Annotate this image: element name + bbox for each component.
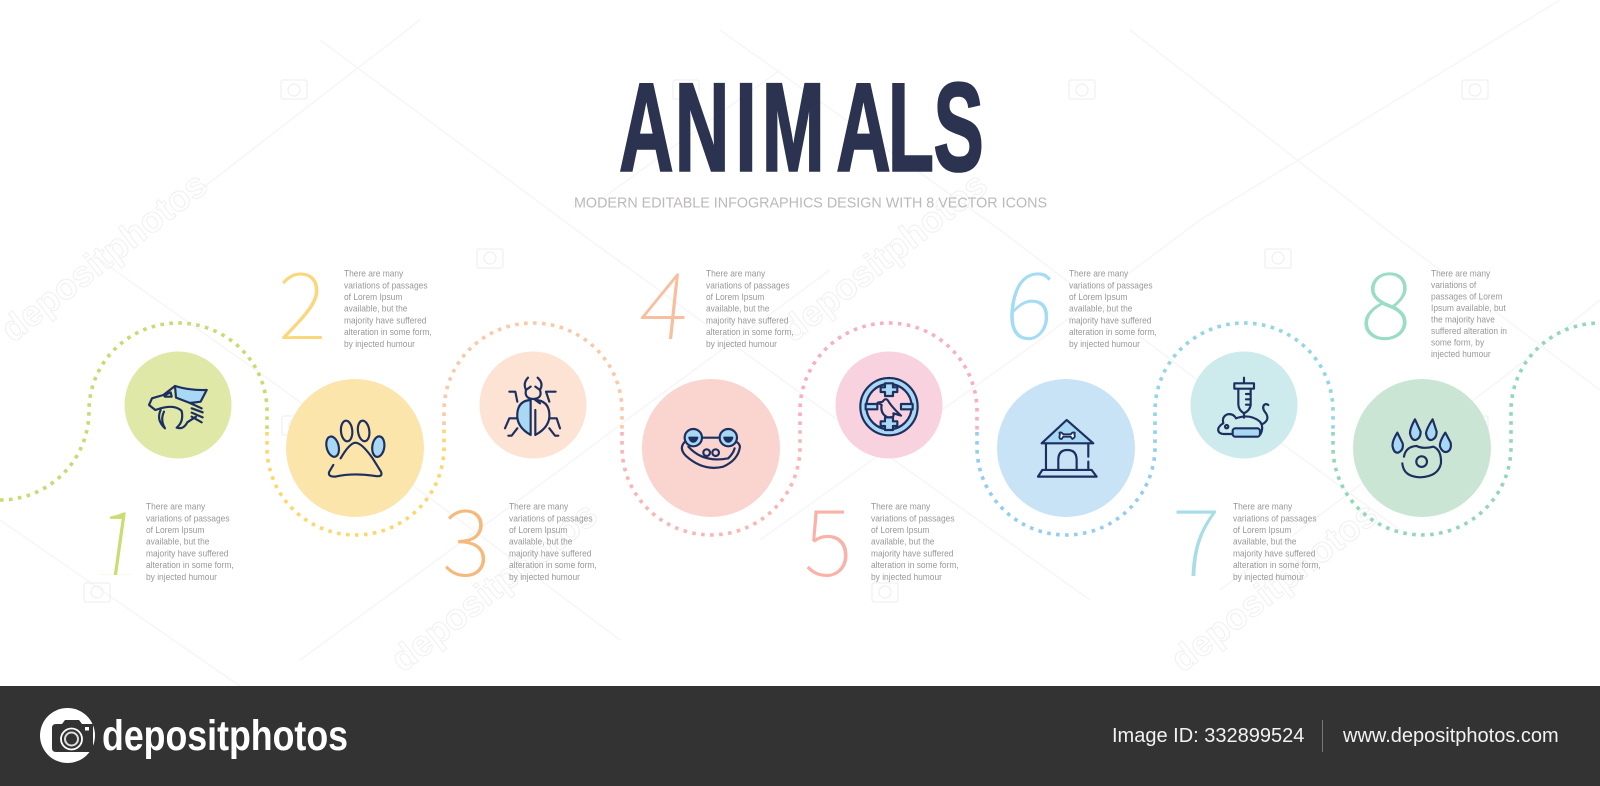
step 4 circle <box>642 379 780 517</box>
watermark pattern: depositphotos <box>1163 493 1385 680</box>
number 6: 6 <box>999 231 1062 366</box>
text block 1: variations of passages <box>146 513 230 523</box>
number 3: 3 <box>442 468 490 603</box>
text block 5: by injected humour <box>871 572 942 582</box>
text block 8: injected humour <box>1431 349 1491 359</box>
text block 7: by injected humour <box>1233 572 1304 582</box>
text block 7: There are many <box>1233 501 1293 512</box>
text block 3: available, but the <box>509 536 573 547</box>
text block 1: alteration in some form, <box>146 560 234 570</box>
icon: frog <box>682 429 740 468</box>
text block 2: by injected humour <box>344 339 415 349</box>
text block 2: alteration in some form, <box>344 327 432 337</box>
footer bar <box>0 686 1600 786</box>
icon: clawed paw <box>1392 419 1451 477</box>
text block 6: of Lorem Ipsum <box>1069 292 1127 302</box>
text block 3: majority have suffered <box>509 548 592 558</box>
text block 3: of Lorem Ipsum <box>509 525 567 535</box>
text block 4: majority have suffered <box>706 315 789 325</box>
text block 6: majority have suffered <box>1069 315 1152 325</box>
text block 1: There are many <box>146 501 206 512</box>
text block 4: by injected humour <box>706 339 777 349</box>
text block 7: of Lorem Ipsum <box>1233 525 1291 535</box>
text block 8: suffered alteration in <box>1431 326 1507 336</box>
text block 8: the majority have <box>1431 314 1495 325</box>
number 5: 5 <box>804 468 852 603</box>
logo wordmark: depositphotos <box>102 712 348 760</box>
number 1: 1 <box>85 471 153 605</box>
text block 4: There are many <box>706 268 766 279</box>
text block 4: of Lorem Ipsum <box>706 292 764 302</box>
text block 6: alteration in some form, <box>1069 327 1157 337</box>
text block 6: by injected humour <box>1069 339 1140 349</box>
watermark pattern: depositphotos <box>773 163 995 350</box>
watermark pattern: depositphotos <box>383 493 605 680</box>
text block 1: of Lorem Ipsum <box>146 525 204 535</box>
step 3 circle <box>480 352 586 458</box>
text block 8: passages of Lorem <box>1431 291 1502 302</box>
image id: Image ID: 332899524 <box>1112 725 1304 747</box>
icon: lab mouse with syringe <box>1218 378 1268 437</box>
number 4: 4 <box>634 231 697 366</box>
text block 4: alteration in some form, <box>706 327 794 337</box>
text block 2: majority have suffered <box>344 315 427 325</box>
icon: paw print <box>324 420 386 477</box>
text block 2: variations of passages <box>344 280 428 290</box>
text block 7: majority have suffered <box>1233 548 1316 558</box>
number 7: 7 <box>1172 468 1220 603</box>
subtitle: MODERN EDITABLE INFOGRAPHICS DESIGN WITH 8 VECTOR ICONS <box>574 196 1047 212</box>
step 5 circle <box>836 352 942 458</box>
text block 5: available, but the <box>871 536 935 547</box>
text block 2: of Lorem Ipsum <box>344 292 402 302</box>
text block 8: variations of <box>1431 280 1477 290</box>
icon: dog house <box>1038 420 1097 477</box>
icon: bird in crosshair <box>860 378 918 435</box>
icon: stag beetle <box>505 378 560 436</box>
text block 8: There are many <box>1431 268 1491 279</box>
step 2 circle <box>286 379 424 517</box>
number 2: 2 <box>278 231 326 366</box>
text block 7: alteration in some form, <box>1233 560 1321 570</box>
text block 3: alteration in some form, <box>509 560 597 570</box>
text block 2: There are many <box>344 268 404 279</box>
text block 8: some form, by <box>1431 337 1485 348</box>
website: www.depositphotos.com <box>1342 725 1559 747</box>
icon: sabre-tooth tiger <box>149 386 207 428</box>
text block 4: variations of passages <box>706 280 790 290</box>
text block 5: majority have suffered <box>871 548 954 558</box>
text block 5: alteration in some form, <box>871 560 959 570</box>
text block 6: There are many <box>1069 268 1129 279</box>
text block 6: variations of passages <box>1069 280 1153 290</box>
step 8 circle <box>1353 379 1491 517</box>
step 7 circle <box>1190 352 1298 458</box>
text block 4: available, but the <box>706 303 770 314</box>
text block 7: variations of passages <box>1233 513 1317 523</box>
text block 2: available, but the <box>344 303 408 314</box>
text block 8: Ipsum available, but <box>1431 303 1506 313</box>
number 8: 8 <box>1357 232 1417 366</box>
text block 6: available, but the <box>1069 303 1133 314</box>
text block 1: majority have suffered <box>146 548 229 558</box>
text block 7: available, but the <box>1233 536 1297 547</box>
dotted wave path <box>0 323 1600 535</box>
text block 1: available, but the <box>146 536 210 547</box>
step 6 circle <box>997 379 1135 517</box>
text block 3: variations of passages <box>509 513 593 523</box>
title: ANIMALS <box>619 58 984 197</box>
text block 5: of Lorem Ipsum <box>871 525 929 535</box>
text block 1: by injected humour <box>146 572 217 582</box>
logo: camera badge <box>40 708 95 763</box>
step 1 circle <box>124 352 232 458</box>
text block 5: variations of passages <box>871 513 955 523</box>
text block 3: by injected humour <box>509 572 580 582</box>
text block 3: There are many <box>509 501 569 512</box>
text block 5: There are many <box>871 501 931 512</box>
